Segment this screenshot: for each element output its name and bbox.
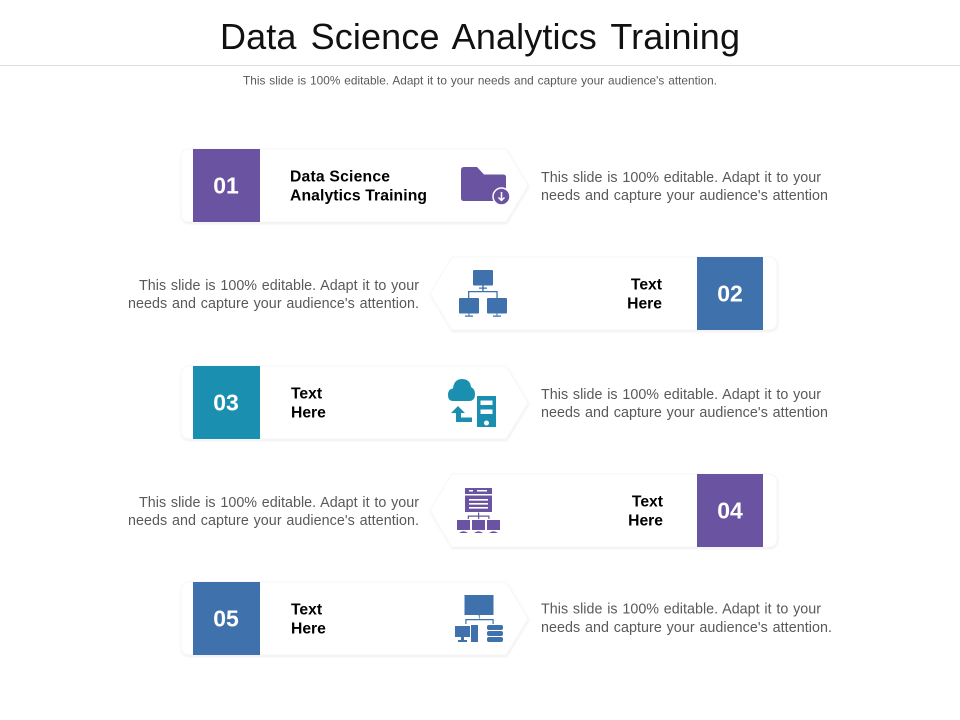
number 02 [697,257,763,330]
number 01 [193,149,260,222]
number 04 [697,474,763,547]
card 04 [430,474,777,547]
description 03 [541,387,828,421]
icon: monitor network [455,595,503,642]
heading 03 [291,386,326,422]
heading 02 [627,276,663,312]
description 04: This slide is 100% editable. Adapt it to your [139,495,419,511]
heading 05 [291,602,326,638]
description 03: needs and capture your audience's attention [541,405,828,421]
number 01: 01 [213,172,239,198]
number 05: 05 [213,606,239,632]
heading 03: Text [291,386,323,402]
heading 04: Text [632,494,664,510]
card 05 [181,582,528,655]
description 05: needs and capture your audience's attention. [541,620,832,636]
description 01: This slide is 100% editable. Adapt it to your [541,170,821,186]
icon: folder download [461,167,510,205]
heading 05: Here [291,620,326,638]
description 01: needs and capture your audience's attention [541,188,828,204]
heading 05: Text [291,602,323,618]
heading 02: Text [631,276,663,294]
description 02: This slide is 100% editable. Adapt it to your [139,278,419,294]
description 04: needs and capture your audience's attention. [128,513,419,529]
panel: item 03 [181,366,828,439]
heading 04 [628,494,664,530]
description 02 [128,278,419,312]
heading 01: Analytics Training [290,188,427,204]
heading 01 [290,168,427,204]
panel: item 04 [128,474,777,547]
card 02 [430,257,777,330]
description 05 [541,602,832,636]
heading 03: Here [291,404,326,422]
description 01 [541,170,828,204]
panel: item 01 [181,149,828,222]
panel: item 05 [181,582,832,655]
number 03 [193,366,260,439]
description 04 [128,495,419,529]
number 02: 02 [717,280,743,306]
panel: item 02 [128,257,777,330]
number 04: 04 [717,498,743,524]
description 03: This slide is 100% editable. Adapt it to your [541,387,821,403]
heading 01: Data Science [290,168,390,186]
description 02: needs and capture your audience's attention. [128,296,419,312]
icon: cloud upload server [448,379,496,427]
subtitle: This slide is 100% editable. Adapt it to your needs and capture your audience's attention. [243,74,717,88]
number 05 [193,582,260,655]
card 03 [181,366,528,439]
number 03: 03 [213,390,239,416]
card 01 [181,149,528,222]
icon: hierarchy window [457,488,500,533]
heading 02: Here [627,296,662,312]
heading 04: Here [628,512,663,530]
title: Data Science Analytics Training [220,16,740,57]
icon: network computers [459,270,507,317]
description 05: This slide is 100% editable. Adapt it to your [541,602,821,618]
